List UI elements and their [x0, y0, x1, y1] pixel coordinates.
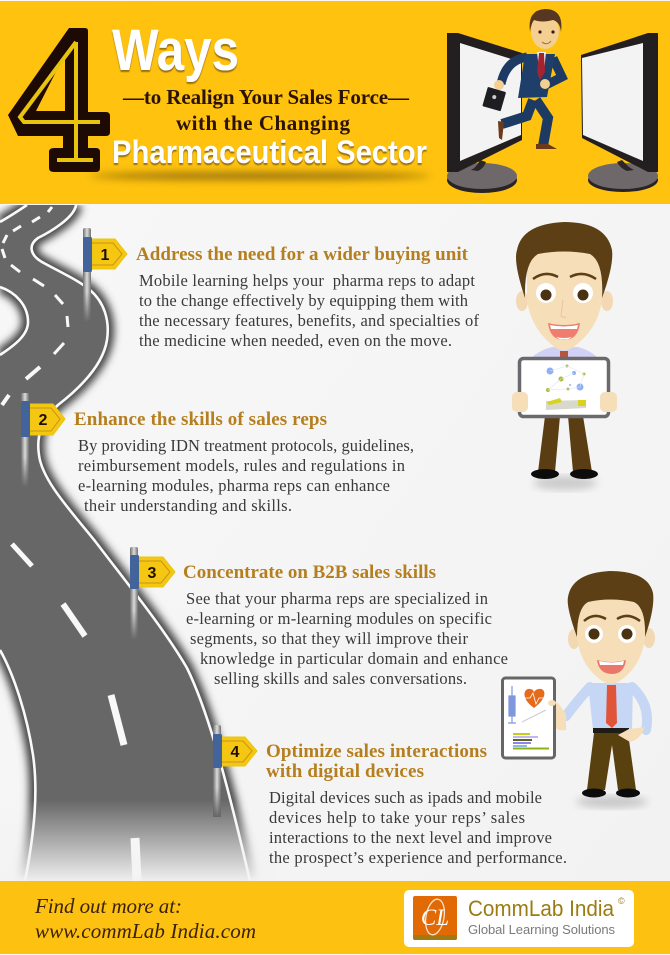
section 2 body: reimbursement models, rules and regulations in	[78, 456, 405, 475]
signpost 4	[213, 725, 257, 817]
illustration: left monitor	[447, 33, 522, 193]
footer text: find out more: Find out more at:	[34, 894, 182, 918]
header banner	[0, 1, 670, 204]
logo icon: CL	[421, 905, 449, 930]
section 4 heading: with digital devices	[266, 761, 424, 782]
signpost 3: 3	[148, 565, 157, 582]
section 4 body: interactions to the next level and improve	[269, 828, 552, 847]
footer text: find out more: www.commLab India.com	[35, 919, 256, 943]
signpost 3	[130, 547, 175, 640]
section 1 body: to the change effectively by equipping them with	[139, 291, 469, 310]
section 2 body: By providing IDN treatment protocols, guidelines,	[78, 436, 414, 455]
logo: CommLab India: Global Learning Solutions	[468, 922, 616, 937]
section 4 body: the prospect’s experience and performance.	[269, 848, 567, 867]
signpost 2	[21, 393, 65, 487]
section 3 body: knowledge in particular domain and enhance	[200, 649, 508, 668]
section 1 heading: Address the need for a wider buying unit	[136, 244, 469, 265]
logo: CommLab India: CommLab India	[468, 896, 615, 921]
signpost 1: 1	[101, 247, 110, 264]
big numeral 4	[8, 28, 110, 172]
section 2 body	[78, 436, 414, 515]
section 1 text	[136, 244, 480, 350]
section 3 body: See that your pharma reps are specialized in	[186, 589, 488, 608]
section 4 text	[266, 741, 567, 867]
section 4 body: Digital devices such as ipads and mobile	[269, 788, 542, 807]
section 3 body: selling skills and sales conversations.	[214, 669, 467, 688]
illustration: right monitor	[581, 33, 658, 192]
character: man presenting tablet	[502, 571, 655, 808]
road	[0, 205, 275, 881]
section 1 body	[139, 271, 480, 350]
section 3 text	[183, 562, 508, 688]
logo: CommLab India	[404, 890, 634, 947]
section 2 body: their understanding and skills.	[84, 496, 292, 515]
illustration: running businessman	[482, 9, 562, 149]
section 3 body: segments, so that they will improve their	[190, 629, 468, 648]
section 3 body	[186, 589, 508, 688]
section 1 body: the medicine when needed, even on the move.	[139, 331, 452, 350]
logo icon	[413, 896, 457, 940]
title: subtitle line 1: —to Realign Your Sales Force—	[122, 85, 410, 109]
section 3 body: e-learning or m-learning modules on specific	[186, 609, 492, 628]
section 2 text	[74, 409, 414, 515]
signpost 1	[83, 228, 127, 322]
section 1 body: the necessary features, benefits, and specialties of	[139, 311, 480, 330]
footer text: find out more	[34, 894, 256, 943]
section 1 body: Mobile learning helps your pharma reps to adapt	[139, 271, 475, 290]
title: Pharmaceutical Sector: Pharmaceutical Sector	[112, 134, 427, 170]
signpost 4: 4	[231, 744, 240, 761]
section 4 body: devices help to take your reps’ sales	[269, 808, 525, 827]
section 4 heading	[266, 741, 487, 782]
section 2 body: e-learning modules, pharma reps can enhance	[78, 476, 390, 495]
section 4 body	[269, 788, 567, 867]
title: Ways: Ways	[112, 18, 239, 83]
section 3 heading: Concentrate on B2B sales skills	[183, 562, 436, 583]
section 2 heading: Enhance the skills of sales reps	[74, 409, 327, 430]
section 4 heading: Optimize sales interactions	[266, 741, 487, 762]
title shadow	[90, 172, 430, 180]
footer band	[0, 881, 670, 954]
signpost 2: 2	[39, 412, 48, 429]
logo: CommLab India: ©	[618, 896, 625, 906]
title: subtitle line 2: with the Changing	[176, 111, 350, 135]
character: man holding tablet	[512, 222, 617, 490]
